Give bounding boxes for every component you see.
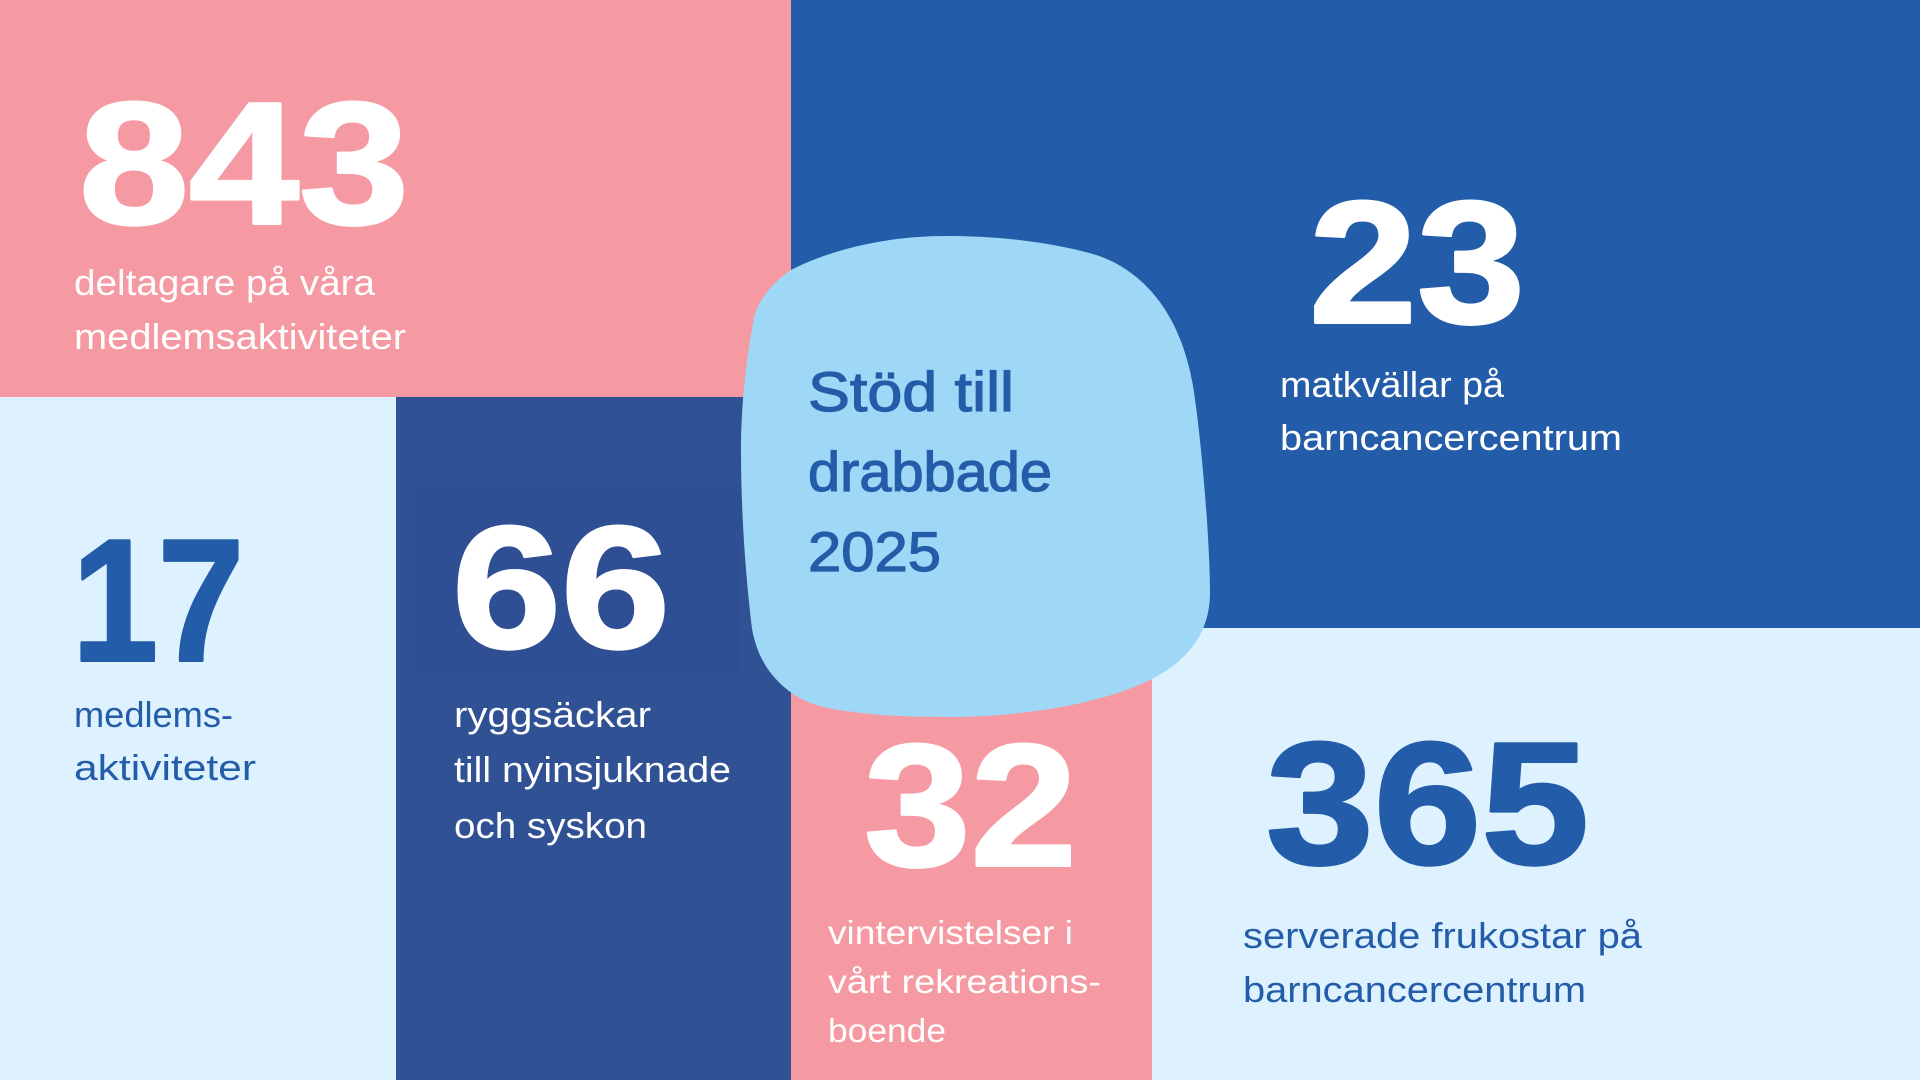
title: drabbade: [808, 440, 1052, 503]
caption: backpacks: ryggsäckar: [454, 694, 651, 735]
caption: breakfasts: serverade frukostar på: [1243, 915, 1643, 956]
panel: 23 food evenings: [791, 0, 1920, 628]
title: Stöd till: [808, 360, 1014, 423]
caption: food evenings: [1280, 364, 1622, 458]
title: [808, 360, 1052, 583]
panel: 32 winter stays: [791, 660, 1152, 1080]
panel: 843 participants: [0, 0, 791, 397]
caption: backpacks: till nyinsjuknade: [454, 749, 731, 790]
caption: backpacks: och syskon: [454, 805, 647, 846]
caption: participants: [74, 262, 406, 357]
caption: member activities: [74, 694, 256, 788]
caption: backpacks: [454, 694, 731, 846]
caption: winter stays: [828, 914, 1101, 1049]
caption: breakfasts: barncancercentrum: [1243, 969, 1586, 1010]
number: 66: 66: [452, 490, 670, 684]
panel: 365 breakfasts: [1152, 628, 1920, 1080]
caption: food evenings: matkvällar på: [1280, 364, 1505, 405]
centre blob with title: [741, 236, 1210, 717]
caption: food evenings: barncancercentrum: [1280, 417, 1622, 458]
number: 17: 17: [72, 502, 244, 698]
number: 23: 23: [1309, 164, 1525, 360]
caption: winter stays: boende: [828, 1012, 946, 1049]
caption: winter stays: vintervistelser i: [828, 914, 1073, 951]
panel: 66 backpacks: [396, 397, 791, 1080]
panel: 17 member activities: [0, 397, 396, 1080]
number: 365: 365: [1266, 706, 1589, 900]
number: 32: 32: [864, 708, 1077, 902]
caption: participants: deltagare på våra: [74, 262, 376, 303]
title: 2025: [808, 520, 941, 583]
caption: winter stays: vårt rekreations-: [828, 963, 1101, 1000]
caption: participants: medlemsaktiviteter: [74, 316, 406, 357]
caption: breakfasts: [1243, 915, 1643, 1010]
caption: member activities: medlems-: [74, 694, 233, 735]
caption: member activities: aktiviteter: [74, 747, 256, 788]
number: 843: 843: [79, 66, 409, 260]
